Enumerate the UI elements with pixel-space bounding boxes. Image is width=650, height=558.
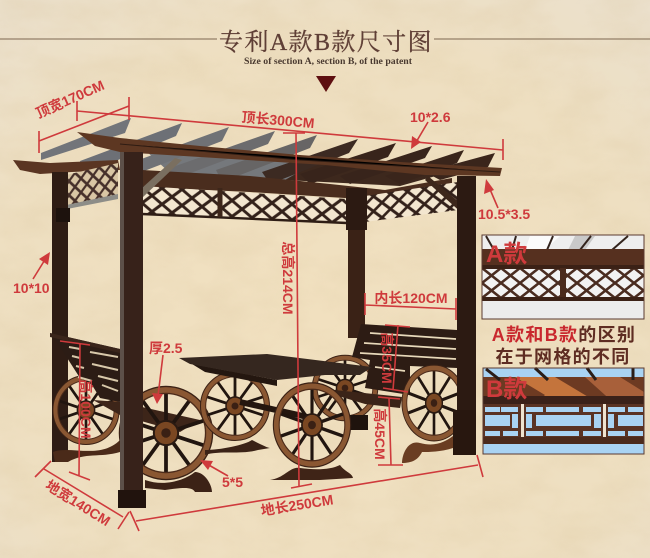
- far-left post: [52, 172, 68, 462]
- braces: [142, 158, 182, 198]
- panel: style A: [482, 235, 644, 319]
- table: [179, 354, 372, 480]
- rafters: [41, 118, 495, 184]
- dimension: bench back 35CM: 高35CM: [379, 332, 395, 384]
- callout: thickness 2.5: [149, 340, 183, 404]
- callout: thickness 2.5: 厚2.5: [149, 340, 183, 356]
- callout: 10.5*3.5: [478, 179, 530, 222]
- label: B款: B款: [486, 376, 527, 403]
- side beam left: [13, 160, 120, 174]
- text: difference between A and B: A款和B款的区别: [492, 325, 636, 345]
- text: difference between A and B: 在于网格的不同: [495, 347, 631, 367]
- side lattice right: [365, 182, 458, 222]
- back lattice: [142, 186, 347, 222]
- dimension: top width 170CM: 顶宽170CM: [33, 77, 107, 121]
- subtitle: Size of section A, section B, of the patent: [244, 56, 412, 66]
- dimension: ground width 140CM: 地宽140CM: [43, 477, 113, 529]
- title: 专利A款B款尺寸图: [219, 29, 433, 56]
- label: A款: A款: [486, 241, 527, 268]
- callout: 10*2.6: [410, 109, 451, 149]
- dimension: top length 300CM: [77, 101, 503, 160]
- back beam: [142, 170, 452, 198]
- front beam: [77, 132, 502, 176]
- callout: 10*2.6: 10*2.6: [410, 109, 451, 125]
- callout: 10.5*3.5: 10.5*3.5: [478, 206, 530, 222]
- dimension: ground length 250CM: [130, 455, 483, 531]
- side lattice left: [57, 163, 118, 208]
- callout: 5*5: [200, 460, 243, 490]
- left bench: [50, 333, 200, 462]
- callout: 10*10: [13, 252, 50, 296]
- dimension: ground length 250CM: 地长250CM: [260, 491, 334, 519]
- rear-right post: [348, 188, 365, 338]
- dimension: seat height 45CM: 高45CM: [372, 408, 388, 460]
- under-beam rafter field: [145, 150, 330, 180]
- dimension: inner length 120CM: 内长120CM: [374, 290, 448, 306]
- front-left post: [118, 152, 146, 508]
- callout: 10*10: 10*10: [13, 280, 50, 296]
- dimension: total height 214CM: [280, 133, 312, 488]
- text: difference between A and B: [492, 325, 636, 367]
- front-right post: [453, 176, 476, 455]
- dimension: bench back height 100CM: 高100CM: [78, 379, 94, 439]
- left bench front wheel and foot: [119, 386, 213, 492]
- lattice: [483, 404, 644, 438]
- callout: 5*5: 5*5: [222, 474, 243, 490]
- dimension: ground width 140CM: [35, 461, 129, 529]
- dimension: top width 170CM: [33, 77, 129, 153]
- dimension: inner length 120CM: [365, 290, 456, 320]
- right bench: [312, 324, 466, 463]
- pergola frame: [13, 118, 502, 462]
- icon: down triangle: [316, 76, 336, 92]
- dimension: total height 214CM: 总高214CM: [280, 241, 296, 315]
- dimension: bench back 35CM: [379, 325, 410, 392]
- dimension: top length 300CM: 顶长300CM: [241, 109, 315, 131]
- dimension: seat height 45CM: [372, 397, 403, 465]
- dimension: bench back height 100CM: [60, 341, 94, 480]
- panel: style B: [483, 368, 644, 454]
